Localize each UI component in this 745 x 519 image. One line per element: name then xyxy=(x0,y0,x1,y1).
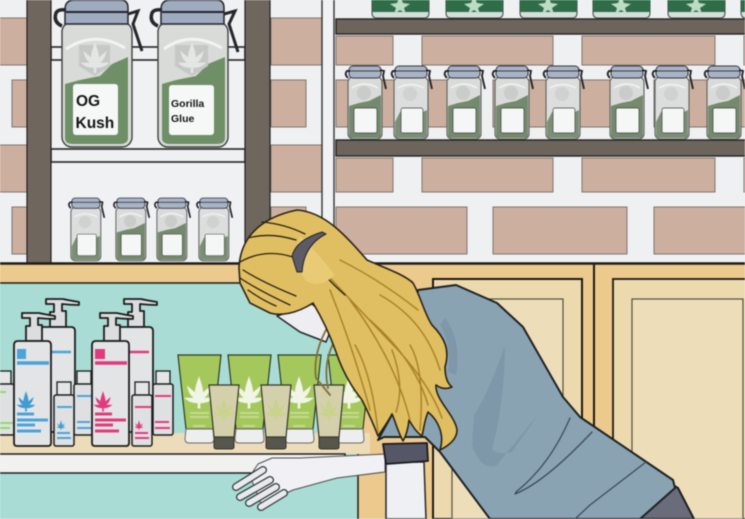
display shelf xyxy=(0,433,370,473)
right shelf small jars xyxy=(346,66,745,139)
icon: left green sample xyxy=(0,371,14,435)
shirt folds xyxy=(440,318,540,467)
hair tie xyxy=(292,232,326,272)
top row of green-labelled jars xyxy=(372,0,745,18)
lower left small jars xyxy=(69,198,232,261)
hair strands xyxy=(312,258,442,432)
shirt cuff xyxy=(383,443,428,464)
teal display case xyxy=(0,283,358,519)
face xyxy=(277,304,334,342)
label text: OG Kush: OG xyxy=(76,93,100,110)
jar: Gorilla Glue xyxy=(151,0,238,147)
cabinets xyxy=(0,264,745,519)
label text: Gorilla Glue: Gorilla xyxy=(171,98,204,110)
pink bottles xyxy=(92,299,173,446)
hair xyxy=(239,210,457,450)
green tubes xyxy=(178,355,371,443)
jeans xyxy=(640,482,694,519)
woman xyxy=(236,210,694,519)
wall columns and shelves xyxy=(27,0,745,264)
brick wall xyxy=(0,18,745,254)
jar: OG Kush xyxy=(55,0,142,147)
near arm xyxy=(386,462,426,519)
blue bottles xyxy=(0,299,94,446)
shirt xyxy=(378,285,675,519)
label text: Gorilla Glue: Glue xyxy=(171,113,194,125)
beige tubes xyxy=(209,385,344,449)
hand fingers xyxy=(236,470,284,507)
hair highlight xyxy=(297,236,335,284)
label text: OG Kush: Kush xyxy=(76,115,114,132)
loose hair over face xyxy=(315,318,338,395)
arm reaching under shelf xyxy=(250,454,385,506)
